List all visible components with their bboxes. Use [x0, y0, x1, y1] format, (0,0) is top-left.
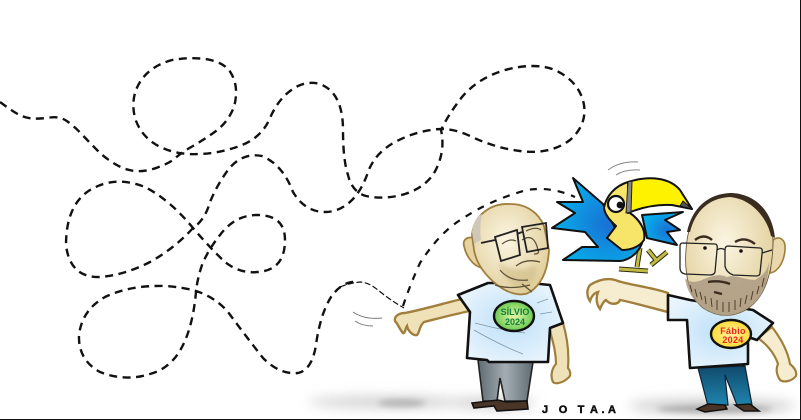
Fabio left arm and hand — [587, 279, 668, 312]
Silvio face wrinkles and mouth — [495, 228, 541, 292]
Fabio head — [686, 194, 773, 315]
toucan beak — [628, 178, 692, 213]
toucan eye — [608, 196, 624, 212]
toucan back wing — [642, 212, 683, 245]
toucan legs and feet — [619, 248, 667, 271]
Fabio eyes — [703, 246, 743, 253]
Fabio right arm and hand — [758, 327, 796, 381]
Silvio left arm and hand — [395, 299, 470, 335]
Silvio badge: SÍLVIO — [501, 307, 529, 317]
character: Fabio — [587, 193, 796, 412]
Fabio shoes — [697, 404, 759, 412]
toucan — [552, 162, 692, 271]
Fabio badge: 2024 — [722, 335, 744, 345]
toucan beak band — [626, 181, 632, 213]
ground shadows — [308, 396, 796, 414]
Silvio badge: 2024 — [505, 317, 525, 327]
Silvio ear — [464, 238, 482, 268]
Silvio glasses — [481, 223, 548, 261]
Fabio badge — [711, 320, 751, 348]
character: Silvio — [395, 204, 570, 411]
toucan blue body and tail — [552, 178, 643, 261]
Silvio shirt creases — [474, 299, 552, 354]
Silvio trousers — [478, 360, 533, 401]
thin dashed path near the hand — [340, 282, 404, 308]
Silvio shoes — [472, 400, 528, 411]
Fabio jeans — [698, 366, 752, 406]
Silvio shirt — [458, 283, 563, 362]
Fabio shirt — [668, 295, 773, 368]
toucan beak tip — [680, 201, 692, 209]
dashed looping flight path — [0, 58, 584, 378]
artist signature: JOTA.A — [542, 404, 616, 416]
Fabio glasses — [680, 243, 772, 276]
Silvio right arm and hand — [549, 323, 570, 383]
Fabio ear — [770, 238, 785, 273]
Silvio hair — [472, 214, 482, 244]
Fabio hair — [687, 193, 775, 238]
Silvio head — [472, 204, 549, 294]
Silvio badge — [494, 301, 534, 331]
toucan yellow head and chest — [604, 182, 644, 250]
toucan motion lines — [608, 162, 640, 175]
Fabio beard stubble — [690, 278, 764, 312]
Silvio face shading — [498, 262, 536, 288]
Fabio face details — [695, 236, 755, 294]
motion lines by the hand — [353, 312, 382, 326]
Fabio badge: Fábio — [720, 326, 746, 336]
dashed path from hand to toucan — [403, 189, 575, 306]
Fabio beard — [685, 262, 769, 315]
